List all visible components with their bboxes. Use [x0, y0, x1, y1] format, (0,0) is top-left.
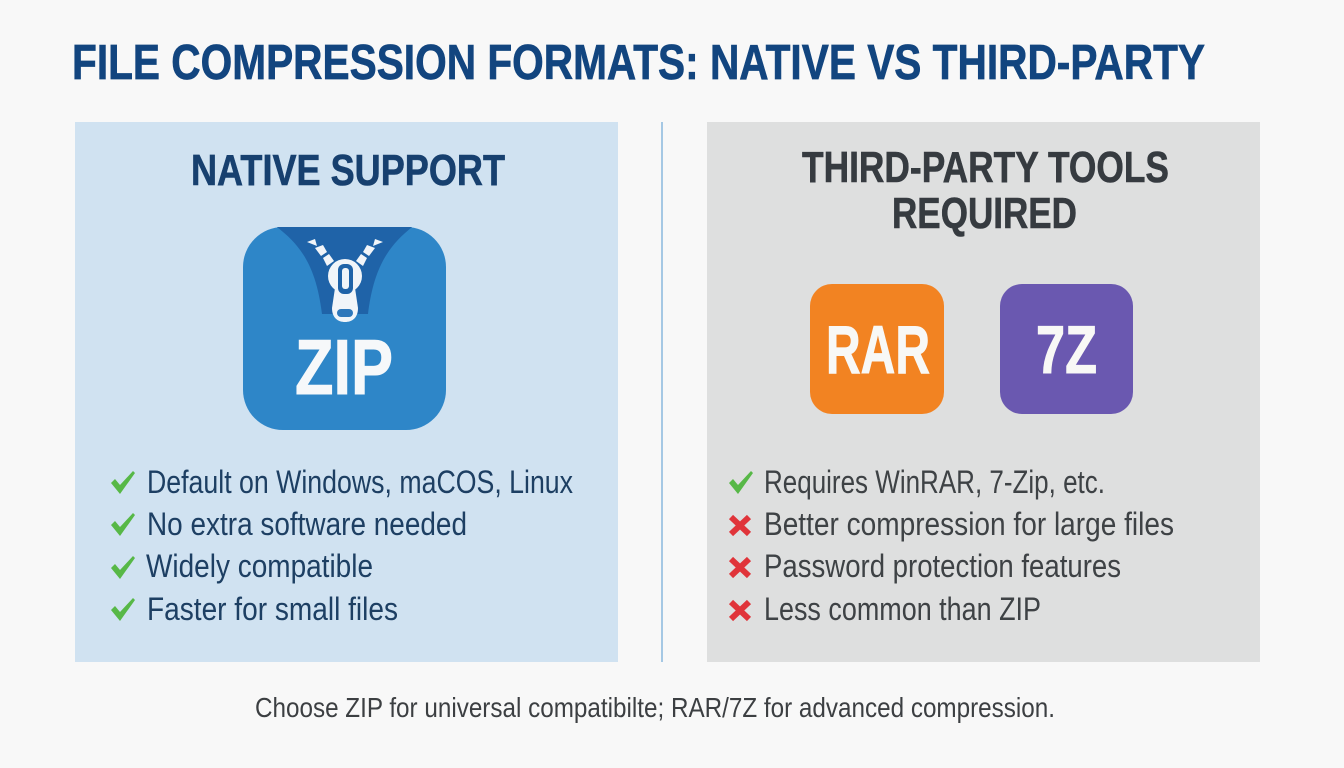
heading: native support: NATIVE SUPPORT	[191, 146, 505, 195]
heading: third-party tools required	[802, 143, 1169, 238]
heading: third-party tools required: REQUIRED	[892, 189, 1077, 238]
icon: ZIP	[243, 227, 446, 430]
zipper slider	[328, 259, 362, 322]
item: compatible: Widely compatible	[146, 548, 373, 584]
cross: better compression	[731, 517, 749, 534]
zipper opening	[277, 227, 412, 314]
icon: 7Z	[1000, 284, 1133, 414]
item: better compression: Better compression for large files	[764, 506, 1174, 542]
check: no extra software	[111, 513, 135, 536]
cross: less common	[731, 602, 749, 619]
item: no extra software: No extra software needed	[147, 506, 467, 542]
zipper teeth	[307, 239, 383, 266]
heading: third-party tools required: THIRD-PARTY TOOLS	[802, 143, 1169, 192]
item: password protection: Password protection features	[764, 548, 1121, 584]
list: third-party points	[729, 464, 1174, 627]
footer note: Choose ZIP for universal compatibilte; RAR/7Z for advanced compression.	[255, 692, 1055, 723]
check: compatible	[111, 556, 135, 579]
item: less common: Less common than ZIP	[764, 591, 1041, 627]
check: requires tools	[729, 471, 753, 494]
icon: RAR: RAR	[826, 312, 930, 388]
check: faster	[111, 598, 135, 621]
panel: third-party tools	[707, 122, 1260, 662]
item: default: Default on Windows, maCOS, Linux	[147, 464, 573, 500]
panel: native support	[75, 122, 618, 662]
check: default	[111, 471, 135, 494]
ZIP label: ZIP	[295, 323, 393, 411]
list: native benefits	[111, 464, 573, 627]
vertical divider	[661, 122, 663, 662]
item: requires tools: Requires WinRAR, 7-Zip, etc.	[764, 464, 1105, 500]
cross: password protection	[731, 559, 749, 576]
icon: RAR	[810, 284, 944, 414]
icon: 7Z: 7Z	[1036, 312, 1097, 388]
item: faster: Faster for small files	[147, 591, 398, 627]
